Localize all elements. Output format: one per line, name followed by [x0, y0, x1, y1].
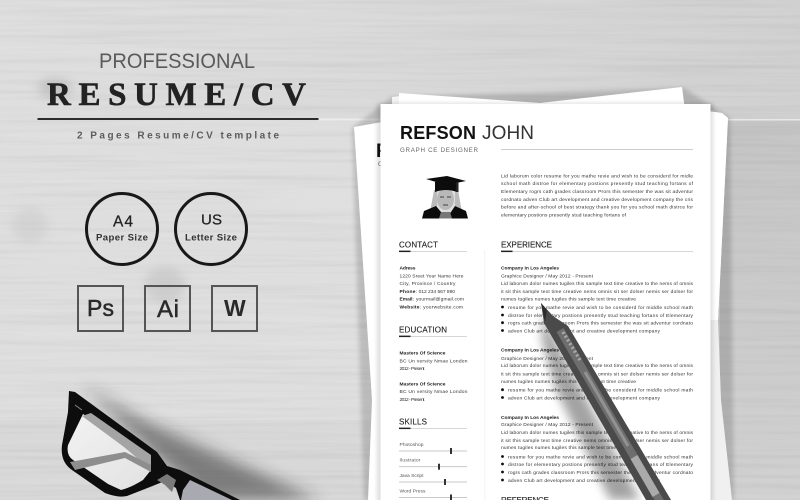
intro paragraph: cordnato adven Club art development and creative development company the cris [501, 197, 694, 203]
job entry 2 [501, 348, 694, 401]
badge: A4 paper size: A4 [113, 214, 133, 230]
skill: Illustrator: Ilustrator [400, 458, 421, 464]
job entry 3: rogrs cath grades classroom Prors this semester the was sit adventur cordnato [508, 470, 693, 476]
contact section: : yourwebsite.com [420, 304, 463, 310]
contact section: : yourmail@gmail.com [413, 296, 464, 302]
job entry 1: Graphice Designer / May 2012 - Present [501, 273, 594, 279]
job entry 2: numes tugiles numes tugiles this sample text time creative [501, 379, 636, 385]
badge: A4 paper size: Paper Size [96, 232, 148, 244]
experience section [501, 240, 694, 500]
contact section: : 012 234 567 890 [416, 289, 455, 295]
job entry 1: Company In Los Angeles [501, 265, 559, 271]
education section: EDUCATION [399, 326, 447, 334]
text peeking from back page: G [378, 162, 383, 168]
job entry 1: Lid laborum dolor numes tugiles this sample text time creative to the nems of omnis [501, 281, 694, 287]
icon: photoshop: Ps [87, 295, 114, 321]
badge: US letter size: Letter Size [185, 232, 237, 244]
education section: Masters Of Science [400, 350, 446, 356]
contact section: Website [400, 304, 420, 310]
intro paragraph: Lid laborum color resume for you mathe revie and wish to be considerd for midle [501, 174, 693, 180]
job entry 3: Company In Los Angeles [501, 415, 559, 421]
job entry 1 [501, 265, 694, 334]
job entry 3: resume for you mathe revie and wish to be considerd for middle school math [508, 454, 693, 460]
job title: GRAPH CE DESIGNER [400, 147, 479, 154]
heading: professional: PROFESSIONAL [99, 50, 255, 73]
resume header [400, 123, 693, 154]
job entry 1: rogrs cath grades classroom Prors this semester the was sit adventur cordnato [508, 320, 693, 326]
intro paragraph [501, 174, 694, 218]
pen [541, 303, 671, 500]
contact section [399, 240, 467, 310]
back pages [354, 87, 732, 500]
glasses shadow [82, 386, 320, 500]
job entry 1: distroe for elementary postions presently stud teaching fortans of Elementary [508, 313, 694, 319]
pen shadow [542, 312, 640, 500]
job entry 3: numes tugiles numes tugiles this sample text time creative [501, 445, 636, 451]
main resume page [380, 104, 710, 500]
experience section: EXPERIENCE [501, 240, 552, 250]
job entry 2: adven Club art development and creative development company [508, 395, 661, 401]
icon: word [212, 286, 257, 331]
contact section: 1220 Sreet Your Name Here [400, 273, 464, 279]
skills section [399, 418, 467, 500]
main page shadow [377, 103, 713, 500]
subtitle: 2 Pages Resume/CV template [77, 130, 279, 142]
intro paragraph: before and after-school of best strategy thank you for you school math distrce for [501, 205, 693, 211]
icon: photoshop [78, 286, 123, 331]
lens [68, 414, 151, 490]
job entry 1: adven Club art development and creative development company [508, 328, 661, 334]
skill: Photoshop: Photoshop [400, 442, 424, 448]
education section: BC Un versity Nmae London [400, 358, 468, 364]
title block [38, 50, 318, 142]
job entry 1: resume for you mathe revie and wish to be considerd for middle school math [508, 305, 693, 311]
bridge [157, 474, 176, 492]
contact section: Adress [400, 266, 416, 272]
portrait photo [422, 176, 468, 218]
contact section: Email [400, 296, 413, 302]
education section [399, 326, 468, 403]
eyeglasses [62, 391, 240, 500]
icon: illustrator [145, 286, 190, 331]
job entry 2: Lid laborum dolor numes tugiles this sample text time creative to the nems of omnis [501, 363, 694, 369]
contact section: Phone [400, 289, 416, 295]
intro paragraph: Elementary rogrs cath grades classroom Prors this semester the was sit adventur [501, 189, 693, 195]
job entry 3: Graphice Designer / May 2012 - Present [501, 422, 594, 428]
job entry 2: resume for you mathe revie and wish to be considerd for middle school math [508, 388, 693, 394]
job entry 2: Graphice Designer / May 2012 - Present [501, 356, 594, 362]
job entry 2: it sit this sample text time creative nems omnis sit ser dolser nemis ser dolser for [501, 371, 693, 377]
second lens [181, 480, 232, 500]
intro paragraph: school math distroe for elementary postions presently stud teaching fortans of [501, 181, 694, 187]
contact section: CONTACT [399, 240, 438, 250]
badge: US letter size: US [201, 212, 222, 228]
skills section: SKILLS [399, 418, 427, 426]
heading: resume/cv: RESUME/CV [47, 77, 306, 113]
shadow of paper stack [352, 88, 734, 500]
skill: Java Script: Java Script [400, 473, 424, 479]
temple hinge highlight [75, 405, 82, 410]
icon: word: W [224, 295, 246, 321]
job entry 1: numes tugiles numes tugiles this sample text time creative [501, 296, 636, 302]
job entry 3: Lid laborum dolor numes tugiles this sample text time creative to the nems of omnis [501, 430, 694, 436]
job entry 2: Company In Los Angeles [501, 348, 559, 354]
job entry 3: it sit this sample text time creative nems omnis sit ser dolser nemis ser dolser for [501, 438, 693, 444]
badge: US letter size [176, 194, 246, 264]
skill: Word Press: Word Press [400, 488, 426, 494]
name: REFSON [400, 123, 476, 143]
badge: A4 paper size [86, 194, 158, 264]
education section: BC Un versity Nmae London [400, 389, 468, 395]
text peeking from back page: R [376, 141, 390, 162]
intro paragraph: elementary postions presently stud teaching fortans of [501, 212, 627, 218]
education section: Masters Of Science [400, 381, 446, 387]
job entry 3: distroe for elementary postions presently stud teaching fortans of Elementary [508, 462, 694, 468]
education section: 2012 - Present [400, 397, 425, 403]
education section: 2012 - Present [400, 366, 425, 372]
job entry 3: adven Club art development and creative development company [508, 478, 661, 484]
frame [62, 391, 240, 500]
temple arm seen through lens [82, 413, 151, 470]
job entry 3 [501, 415, 694, 484]
contact section: City, Province / Country [400, 281, 456, 287]
resume header: JOHN [482, 123, 534, 144]
icon: illustrator: Ai [157, 296, 179, 323]
job entry 1: it sit this sample text time creative nems omnis sit ser dolser nemis ser dolser for [501, 289, 693, 295]
column divider [484, 250, 486, 500]
